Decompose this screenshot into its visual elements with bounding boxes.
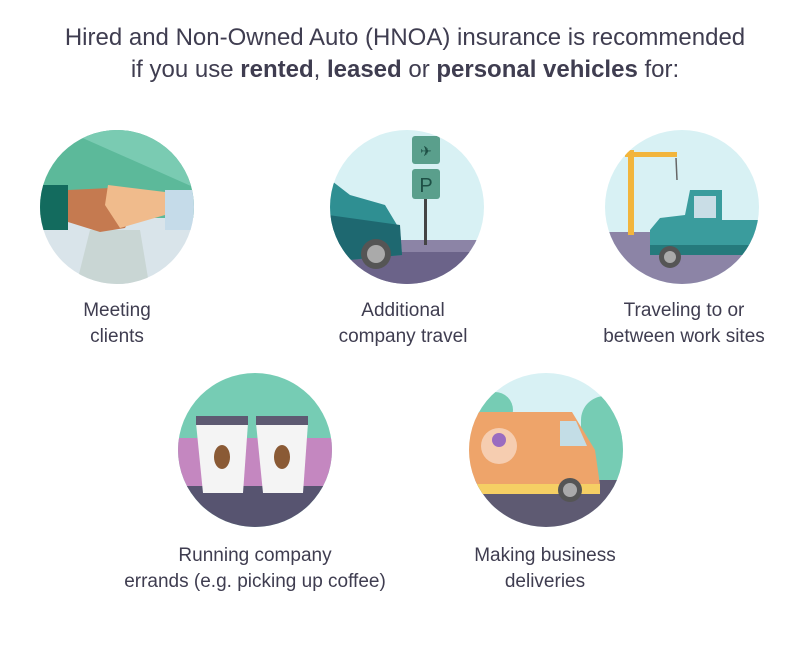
label: traveling to work sites: between work sites: [603, 326, 765, 347]
label: meeting clients: Meeting: [83, 300, 151, 321]
title: Hired and Non-Owned Auto (HNOA) insurance is recommended: [65, 24, 745, 51]
label: running errands: errands (e.g. picking up coffee): [124, 571, 386, 592]
title: [65, 24, 745, 83]
icon: pickup truck and crane: [604, 128, 764, 292]
icon: delivery van: [469, 373, 623, 527]
title: if you use rented, leased or personal vehicles for:: [131, 56, 679, 83]
label: traveling to work sites: Traveling to or: [624, 300, 744, 321]
label: deliveries: Making business: [474, 545, 616, 566]
label: meeting clients: [83, 300, 151, 347]
icon: car at airport parking: [328, 128, 488, 292]
label: additional company travel: company travel: [339, 326, 467, 347]
label: deliveries: deliveries: [505, 571, 585, 592]
label: running errands: [124, 545, 386, 592]
icon: handshake: [38, 128, 200, 290]
label: additional company travel: Additional: [361, 300, 445, 321]
label: traveling to work sites: [603, 300, 765, 347]
label: running errands: Running company: [178, 545, 332, 566]
icon: coffee cups: [178, 373, 332, 527]
label: meeting clients: clients: [90, 326, 144, 347]
label: additional company travel: [339, 300, 467, 347]
icon: car at airport parking: P: [419, 175, 433, 197]
label: deliveries: [474, 545, 616, 592]
icon: car at airport parking: ✈: [420, 143, 432, 159]
